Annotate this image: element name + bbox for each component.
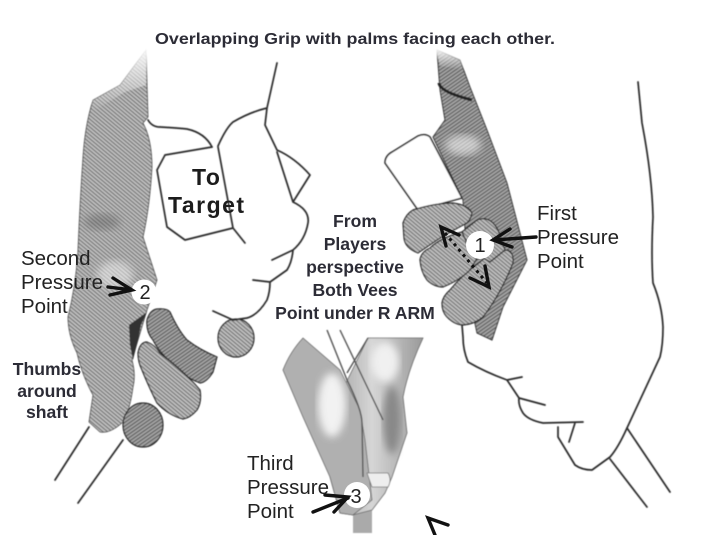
title: Overlapping Grip with palms facing each other. (155, 31, 555, 48)
third pressure point label: Pressure (247, 476, 329, 499)
vees explanation text: perspective (306, 257, 404, 277)
right finger two (420, 232, 485, 287)
third pressure point label: Point (247, 500, 294, 523)
highlight left knuckle (318, 373, 346, 437)
wrist top fade (435, 48, 466, 70)
right white glove outline (462, 82, 663, 470)
left fingertip ball (218, 319, 254, 357)
cropped arrow mark (428, 518, 448, 535)
right hand illustration (385, 48, 670, 507)
right wrist band (439, 83, 472, 100)
vees explanation text: Players (324, 234, 387, 254)
second pressure point label: Point (21, 295, 68, 318)
club grip end (385, 135, 462, 210)
bottom hand drawing (283, 330, 423, 533)
vees explanation text: From (333, 211, 377, 231)
white glove outline (148, 63, 310, 320)
first pressure point label: First (537, 202, 577, 225)
dotted double arrow (441, 227, 489, 287)
left index finger (147, 309, 217, 383)
left club shaft (55, 427, 123, 503)
right club shaft lines (610, 428, 670, 507)
fade at top of forearm (88, 45, 147, 112)
forearm shadow (84, 214, 120, 230)
thumbs around shaft label: around (17, 381, 77, 401)
to target box (157, 147, 245, 243)
arrow to point 3 (313, 495, 348, 512)
thumbs around shaft label: Thumbs (13, 359, 81, 379)
number 2: 2 (139, 282, 151, 304)
left shaded forearm and thumbs (68, 50, 157, 432)
to target label: Target (168, 192, 246, 218)
first pressure point label: Pressure (537, 226, 619, 249)
right shaded wrist (433, 50, 527, 340)
thumb nail (367, 473, 390, 487)
right thumb pad (462, 219, 505, 262)
back hand (330, 338, 423, 515)
wrist highlight (445, 135, 481, 155)
left hand illustration (55, 45, 310, 503)
dark crease between thumbs (129, 312, 147, 360)
pressure point 2 marker (132, 280, 156, 304)
pressure point 1 marker (466, 231, 494, 259)
pressure point 3 marker (344, 482, 370, 508)
number 3: 3 (350, 486, 362, 508)
second pressure point label: Second (21, 247, 91, 270)
left thumb tip ball (123, 403, 163, 447)
forearm highlight (97, 261, 133, 289)
front hand (283, 338, 372, 515)
shadow right side (383, 386, 401, 454)
number 1: 1 (474, 235, 486, 257)
right finger three (442, 250, 513, 325)
highlight upper back hand (371, 342, 399, 382)
crossing lines (327, 330, 383, 477)
thumbs around shaft label: shaft (26, 402, 68, 422)
arrow to point 2 (108, 278, 132, 295)
shaft (353, 505, 372, 533)
first pressure point label: Point (537, 250, 584, 273)
vees explanation text: Point under R ARM (275, 303, 435, 323)
third pressure point label: Third (247, 452, 294, 475)
vees explanation text: Both Vees (312, 280, 398, 300)
to target label: To (192, 164, 221, 190)
left middle finger (138, 342, 201, 419)
second pressure point label: Pressure (21, 271, 103, 294)
arrow to point 1 (493, 229, 536, 247)
right finger one (403, 203, 472, 253)
